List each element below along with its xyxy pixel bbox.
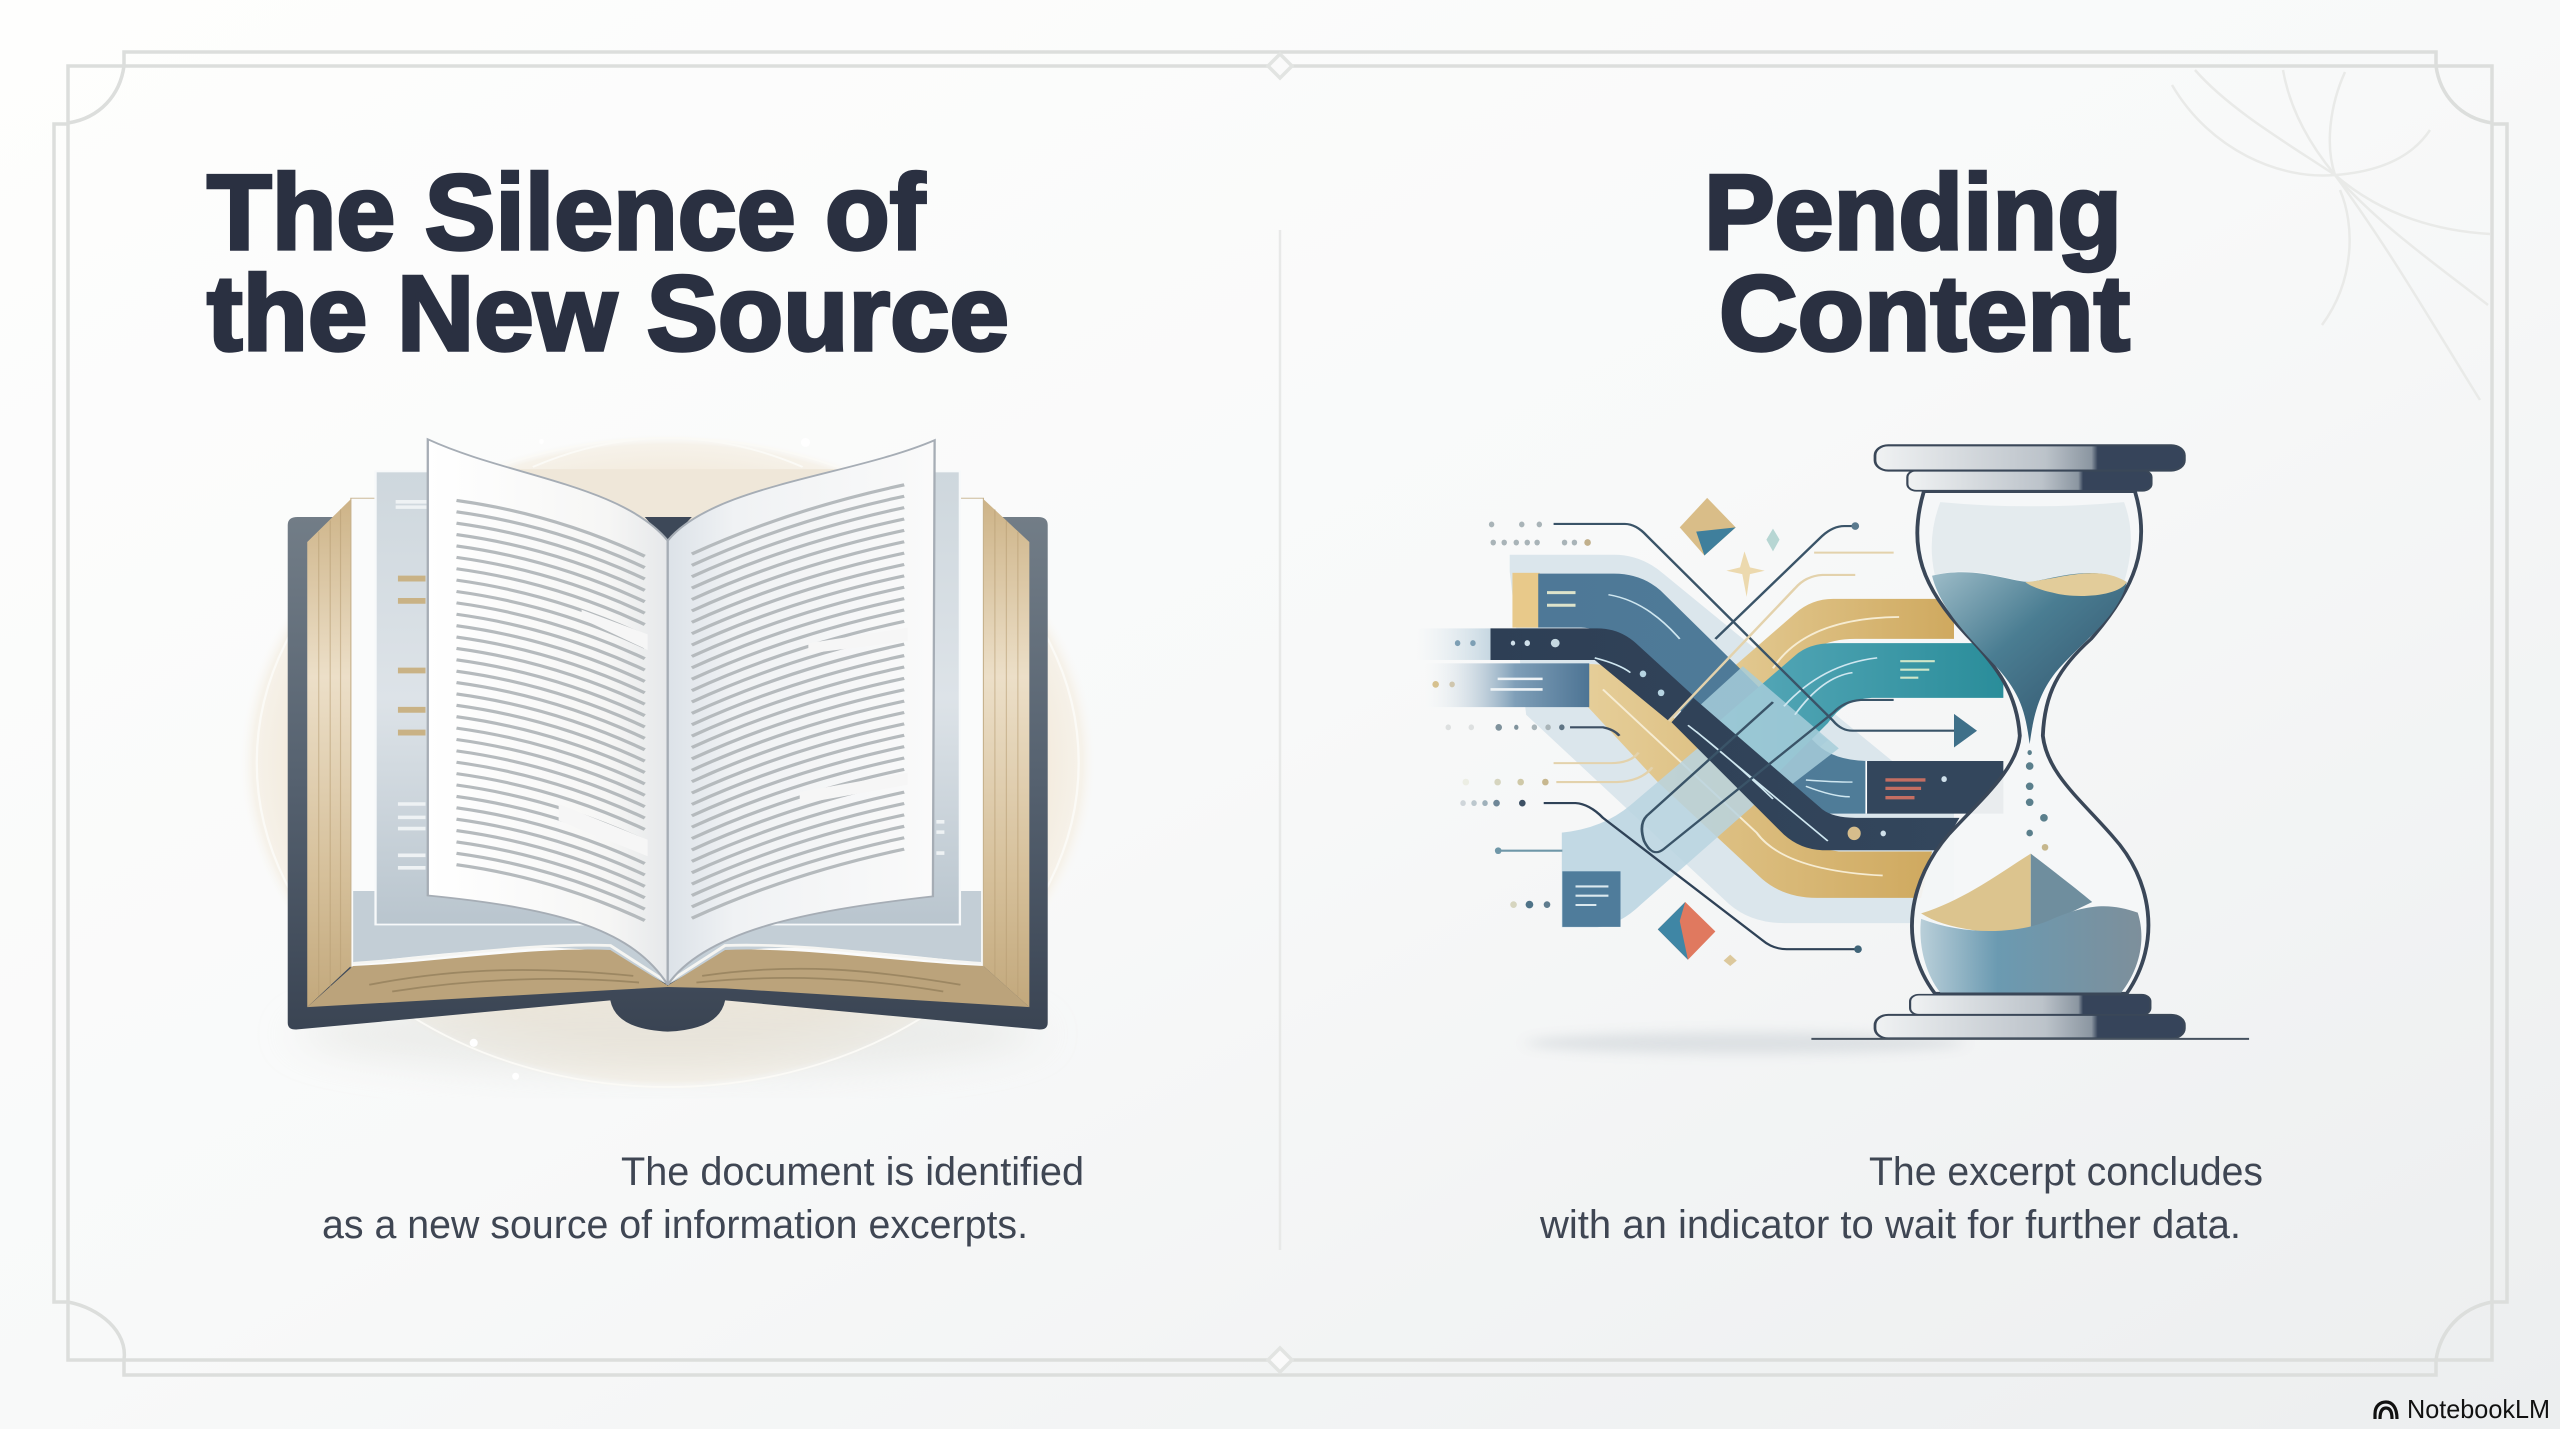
right page text lines: [692, 485, 904, 918]
bottom sand mound: [1921, 854, 2031, 934]
top glass shine: [1932, 502, 2131, 582]
paragraph gaps in text: [559, 610, 908, 856]
white inner pages: [351, 498, 983, 967]
gutter dark wedge: [645, 517, 692, 543]
title: Pending Content: Pending: [1704, 152, 2122, 272]
tan and blue diamond: [1680, 498, 1736, 556]
body text: left: as a new source of information excerpts.: [322, 1203, 1028, 1247]
illustration: open book: [240, 434, 1095, 1091]
tan connector lines: [1554, 553, 1894, 782]
title: The Silence of the New Source: The Silence of: [207, 152, 925, 272]
floor line: [1811, 1036, 2249, 1041]
orange and blue diamond: [1658, 902, 1715, 960]
translucent crossing: [1699, 666, 1839, 790]
body text: right: The excerpt concludes: [1869, 1150, 2263, 1194]
dark label box: [1866, 761, 2003, 814]
tan tab: [1512, 573, 1540, 628]
illustration: data ribbons and hourglass: [1416, 445, 2249, 1054]
teal box text: [1900, 661, 1935, 678]
pale back band: [1510, 555, 1954, 923]
gold ribbon upper: [1669, 599, 1954, 753]
floor shadow: [1526, 1032, 1965, 1054]
arrow head: [1954, 714, 1977, 748]
decorative sunburst lines: [2172, 70, 2490, 400]
bottom page block: [307, 950, 1029, 1007]
title: Pending Content: Content: [1719, 253, 2130, 373]
left main page: [428, 439, 668, 985]
top sand surface: [2025, 573, 2127, 596]
blue left fade strip: [1425, 663, 1589, 707]
bottom water sand: [1920, 906, 2141, 993]
left page block: [307, 499, 351, 1007]
body text: right: [1539, 1150, 2263, 1247]
small blue document: [1562, 871, 1620, 927]
page edge stripes: [319, 509, 1018, 996]
title: Pending Content: [1704, 152, 2130, 373]
gold ribbon highlights: [1603, 617, 1899, 876]
ribbon highlights: [1595, 595, 1877, 841]
slate blue band: [1538, 574, 1866, 814]
title: The Silence of the New Source: the New Source: [207, 253, 1009, 373]
title: The Silence of the New Source: [207, 152, 1009, 373]
connector lines: [1499, 524, 1955, 949]
glass bulbs: [1912, 492, 2148, 993]
grey blue page: [376, 471, 960, 925]
dark navy band: [1491, 628, 1959, 850]
hourglass: [1875, 445, 2184, 1038]
book cover: [288, 517, 1048, 1032]
white page bottom rim: [353, 945, 981, 983]
margin marks: [398, 579, 425, 733]
small teal diamond: [1766, 529, 1780, 551]
fade strip text: [1491, 679, 1543, 689]
NotebookLM watermark: NotebookLM: [2407, 1394, 2550, 1424]
slate box text: [1547, 593, 1576, 605]
bottom page stripes: [369, 969, 960, 991]
mound shadow side: [2031, 854, 2092, 929]
red text marks: [1885, 780, 1925, 798]
grey under pages: [353, 891, 981, 985]
body text: left: The document is identified: [621, 1150, 1084, 1194]
ring arc in gap: [533, 438, 803, 467]
dark left fade strip: [1416, 628, 1493, 660]
top cap: [1875, 445, 2184, 491]
icon: NotebookLM logo: [2375, 1402, 2397, 1419]
connector end dots: [1455, 522, 1947, 953]
gold ribbon lower: [1548, 664, 1932, 898]
scattered data dots: [1432, 521, 1591, 908]
right page block: [983, 499, 1029, 1007]
bottom cap: [1875, 995, 2184, 1038]
sparkle star: [1726, 551, 1765, 597]
body text: right: with an indicator to wait for further data.: [1539, 1203, 2241, 1247]
body text: left: [322, 1150, 1084, 1247]
halo gap between pages: [490, 469, 863, 550]
small tan diamond: [1724, 955, 1737, 966]
left page text lines: [456, 500, 645, 921]
teal band: [1707, 643, 2003, 778]
pale blue crossing ribbon: [1562, 694, 1828, 927]
falling grains: [2026, 750, 2048, 851]
right main page: [668, 440, 935, 985]
top sand: [1932, 572, 2127, 744]
